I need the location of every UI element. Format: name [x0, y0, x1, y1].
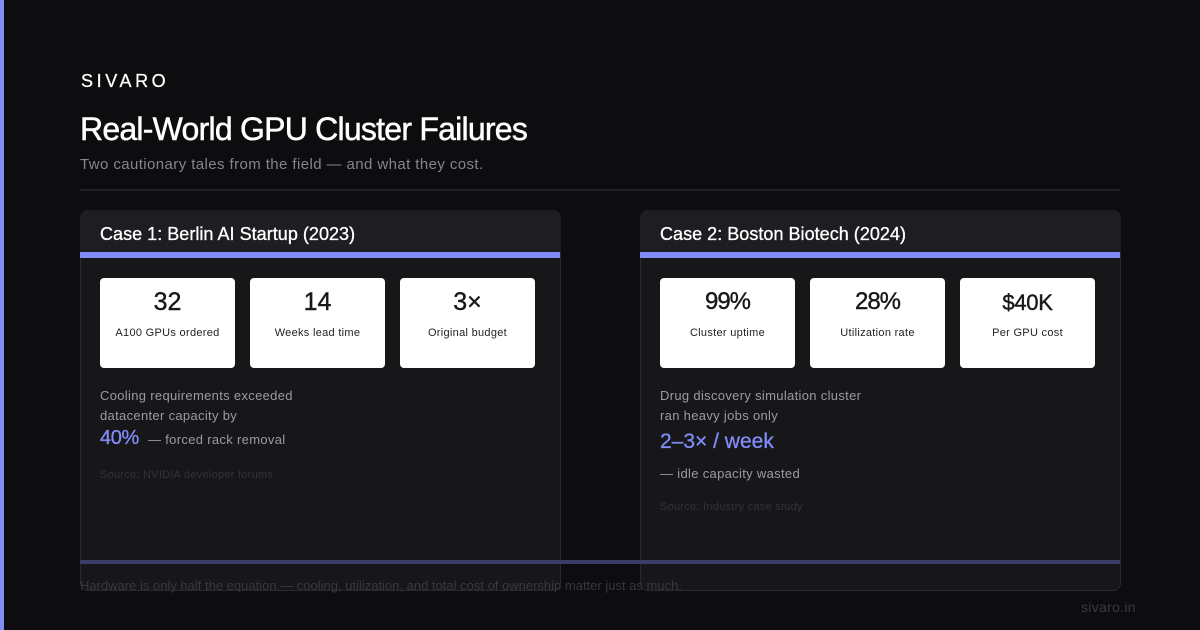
stat: lead time — [250, 278, 385, 368]
stat: lead time: Weeks lead time — [275, 327, 360, 339]
panel: case 2 — [640, 210, 1121, 591]
panel: case 1 — [80, 210, 561, 591]
stat: uptime: Cluster uptime — [690, 327, 765, 339]
stat: budget — [400, 278, 535, 368]
case 1 consequence: — forced rack removal — [148, 432, 285, 447]
case 2 description — [660, 388, 861, 423]
stat: GPUs ordered: A100 GPUs ordered — [115, 327, 220, 339]
stat: cost: $40K — [1002, 290, 1053, 315]
case 2 description: ran heavy jobs only — [660, 408, 778, 423]
site url: sivaro.in — [1081, 599, 1136, 615]
stat: uptime — [660, 278, 795, 368]
case 1 description — [100, 388, 293, 423]
case 2 description: Drug discovery simulation cluster — [660, 388, 861, 403]
case 1 source: Source: NVIDIA developer forums — [100, 469, 273, 481]
stat: utilization: 28% — [855, 288, 900, 315]
case 1 description: datacenter capacity by — [100, 408, 237, 423]
stat: uptime: 99% — [705, 288, 750, 315]
case 1 heading: Case 1: Berlin AI Startup (2023) — [100, 224, 355, 244]
stat: cost: Per GPU cost — [992, 327, 1063, 339]
case 2 heading: Case 2: Boston Biotech (2024) — [660, 224, 906, 244]
takeaway: Hardware is only half the equation — cooling, utilization, and total cost of ownership matter just as much. — [80, 578, 682, 593]
subtitle: Two cautionary tales from the field — and what they cost. — [80, 156, 484, 173]
stat: GPUs ordered: 32 — [154, 288, 181, 316]
stat: budget: Original budget — [428, 327, 507, 339]
case 2 consequence: — idle capacity wasted — [660, 466, 800, 481]
case 2 source: Source: Industry case study — [660, 501, 803, 513]
case 1 description: Cooling requirements exceeded — [100, 388, 293, 403]
brand wordmark: SIVARO — [81, 71, 169, 91]
stat: cost — [960, 278, 1095, 368]
stat: utilization: Utilization rate — [840, 327, 915, 339]
stat: lead time: 14 — [304, 288, 331, 316]
title: Real-World GPU Cluster Failures — [80, 111, 527, 147]
case 1 highlight: 40% — [100, 427, 139, 449]
stat: budget: 3× — [453, 288, 482, 316]
stat: utilization — [810, 278, 945, 368]
accent stripe — [0, 0, 4, 630]
case 2 highlight: 2–3× / week — [660, 430, 774, 453]
stat: GPUs ordered — [100, 278, 235, 368]
